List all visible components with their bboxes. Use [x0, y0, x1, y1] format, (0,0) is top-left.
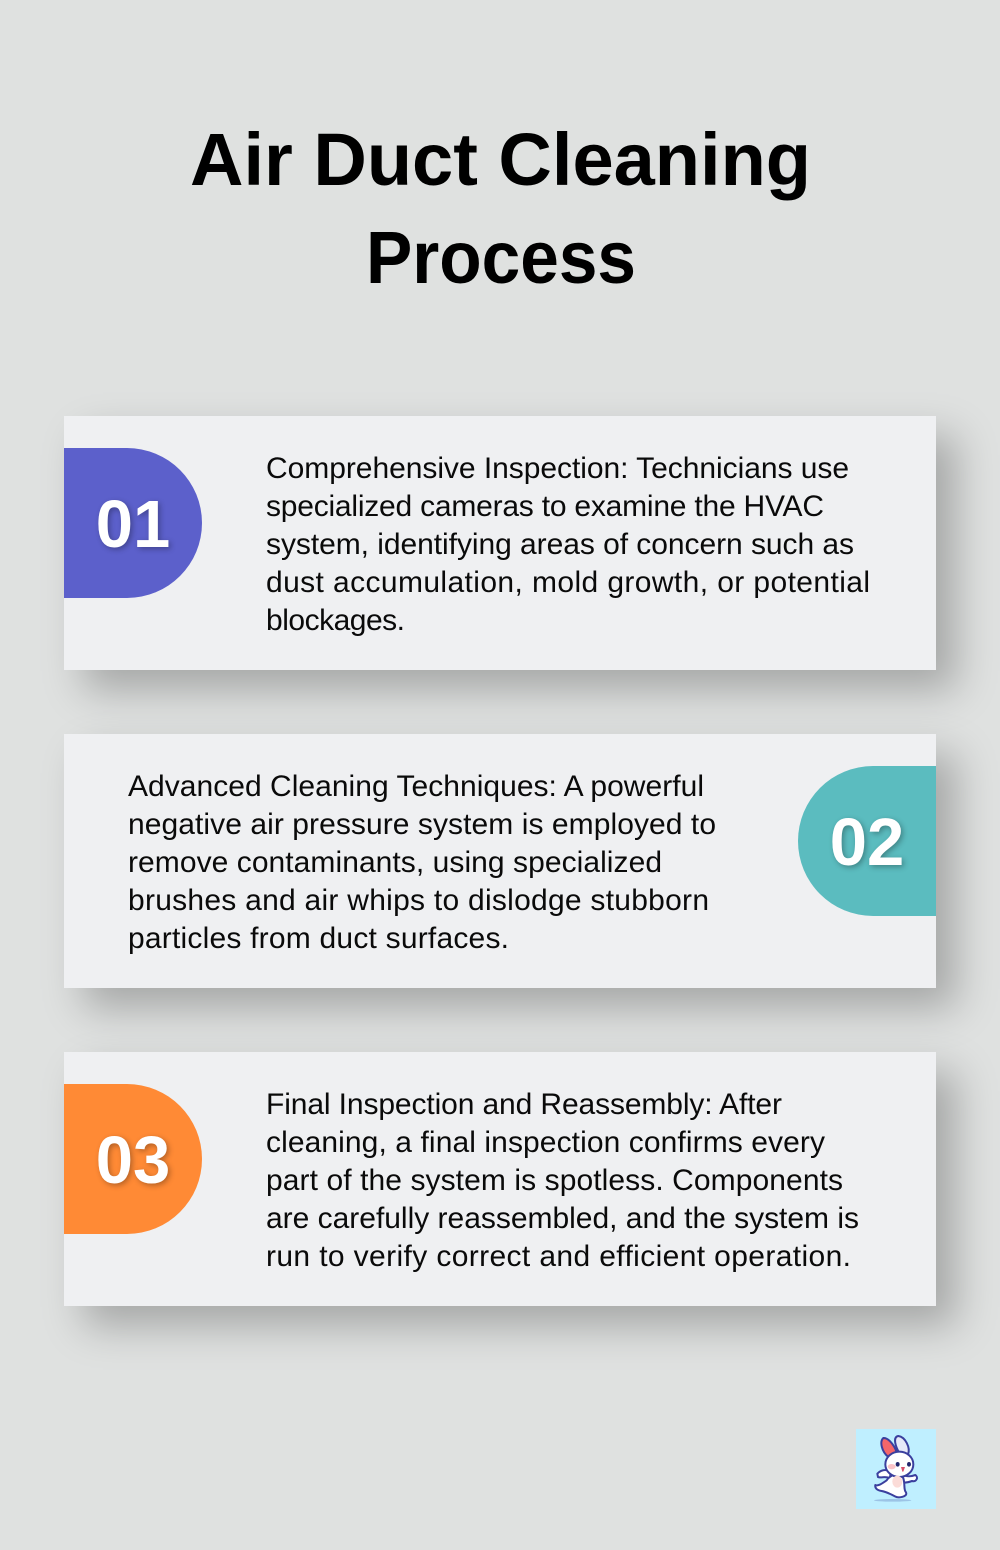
- step 1 text: Comprehensive Inspection: Technicians use: [266, 452, 849, 485]
- step 2 text: brushes and air whips to dislodge stubborn: [128, 884, 709, 917]
- step 3 text: [266, 1088, 859, 1273]
- step 2 number badge: 02: [830, 805, 904, 880]
- step 2 text: remove contaminants, using specialized: [128, 846, 662, 879]
- step 3 text: part of the system is spotless. Components: [266, 1164, 843, 1197]
- step 3 text: Final Inspection and Reassembly: After: [266, 1088, 782, 1121]
- step 2 text: Advanced Cleaning Techniques: A powerful: [128, 770, 704, 803]
- panel: step 1: [64, 416, 936, 670]
- step 2 text: particles from duct surfaces.: [128, 922, 509, 955]
- title: Process: [366, 216, 636, 299]
- panel: step 3: [64, 1052, 936, 1306]
- step 1 text: specialized cameras to examine the HVAC: [266, 490, 824, 523]
- title: Air Duct Cleaning: [190, 118, 811, 201]
- step 3 text: cleaning, a final inspection confirms every: [266, 1126, 825, 1159]
- step 1 text: blockages.: [266, 604, 405, 637]
- step 1 text: dust accumulation, mold growth, or potential: [266, 566, 870, 599]
- step 3 number badge: [64, 1084, 202, 1234]
- step 2 text: negative air pressure system is employed to: [128, 808, 716, 841]
- icon: rabbit logo: [856, 1429, 936, 1509]
- step 3 number badge: 03: [96, 1123, 170, 1198]
- panel: step 2: [64, 734, 936, 988]
- step 2 number badge: [798, 766, 936, 916]
- step 2 text: [128, 770, 716, 955]
- step 1 number badge: 01: [96, 487, 170, 562]
- step 3 text: run to verify correct and efficient operation.: [266, 1240, 851, 1273]
- step 1 text: [266, 452, 870, 637]
- step 1 text: system, identifying areas of concern such as: [266, 528, 854, 561]
- step 3 text: are carefully reassembled, and the system is: [266, 1202, 859, 1235]
- title: [190, 118, 811, 299]
- step 1 number badge: [64, 448, 202, 598]
